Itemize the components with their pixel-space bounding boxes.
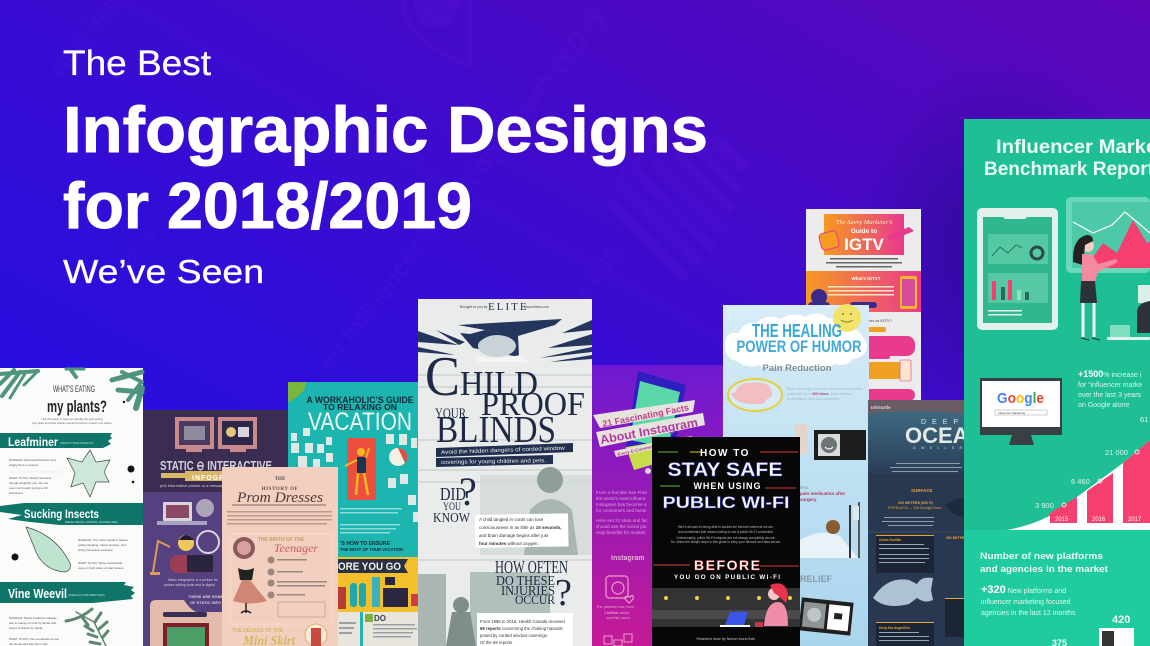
panel: plants: soap on both sides of plant leaves [78,566,124,570]
brush: leafminer [0,433,112,449]
chart: search growth: 21 000 [1105,448,1128,457]
panel: plants: my plants? [47,397,107,416]
panel: plants: edges of leaves by adults [9,626,43,630]
panel: plants [0,368,143,646]
background watermark pattern: $ 6.5B [614,124,666,185]
icon: dress [233,537,267,613]
background watermark pattern: 2016 [117,225,162,273]
panel: workaholic vacation: ORE YOU GO [338,561,401,573]
panel: child proof blinds: www.elitew.com [524,305,549,309]
brush: leafminer: Leafminer [8,435,58,449]
panel: prom dresses: THE DECADE OF THE [232,628,284,634]
did you know: KNOW [433,511,471,526]
body text: Instagram [611,555,644,562]
icon: instagram camera [606,576,633,603]
panel: plants: sticky honeydew excretion [78,548,113,552]
panel: deep ocean dwellers: 300 METERS [946,536,967,540]
panel: new platforms: and agencies in the market [980,564,1109,575]
panel: workaholic vacation: VACATION [308,408,412,436]
leaves [0,369,142,408]
chart: search growth [1007,415,1150,530]
panel: plants: WHAT TO DO: Use nematodes to eat [9,637,59,641]
brush: leafminer: (MINOTYTES) INSECTS [60,441,93,445]
subtitle [436,443,573,467]
body text: Here are 21 stats and fac [596,518,648,523]
panel: instagram facts: The platform has more [596,605,634,609]
before heading [653,557,799,581]
icon: leaf 2 [26,527,70,572]
panel: plants: WHAT TO DO: Spray insecticidal [78,561,122,565]
panel: plants: though unsightly, you can use [9,481,49,485]
panel: plants: DAMAGE: Tiny holes poked in leaves, [78,538,129,542]
panel: healing power of humor: which are up to 500 times more effective [787,392,852,396]
panel: plants: WHAT TO DO: Mostly harmless [9,476,52,480]
body text: should use the social pla [596,524,647,529]
panel: deep ocean dwellers: DEEP [921,419,964,426]
panel: plants: due to eating of roots by larvae and [9,621,56,625]
before heading: YOU GO ON PUBLIC WI-FI [674,574,780,581]
banner: 21 fascinating facts: About Instagram [599,415,699,447]
band: what's IGTV [806,271,921,312]
panel: influencer marketing benchmark report: Benchmark Report [984,159,1150,180]
panel: wifi safety [652,437,800,646]
panel: influencer marketing benchmark report [964,119,1150,646]
panel: healing power of humor: RELIEF [800,574,833,584]
panel: healing power of humor: Pain Reduction [762,363,832,373]
headline: BLINDS [436,409,556,451]
panel: wifi safety: So, follow the simple steps in this guide to keep your devices and data secure. [671,540,781,544]
text: google stat: on Google alone [1078,402,1129,409]
panel: static vs interactive infographic: ph6 informative picture or a message [160,483,227,488]
panel: wifi safety: Unfortunately, public Wi-Fi hotspots are not always completely secure. [677,536,776,540]
panel: workaholic vacation: TO RELAXING ON [323,403,397,412]
background watermark pattern [44,0,775,376]
panel: child proof blinds: ELITE [488,301,529,313]
text box: Of the 69 reports [480,640,512,645]
background watermark pattern: $ 4.6B [574,243,626,304]
panel: wifi safety: WHEN USING [694,481,760,491]
subtitle: coverings for young children and pets. [441,458,547,466]
panel: prom dresses: THE [275,477,286,482]
panel: instagram facts: monthly users [606,616,630,620]
panel: plants: DAMAGE: Discolored blotches and [9,458,56,462]
body text: Instagram has become a [596,502,647,507]
panel: child proof blinds: Brought to you by [460,305,488,309]
panel: healing power of humor: at alleviating pain than morphine. [787,397,840,401]
did you know [433,469,477,526]
title: We’ve Seen [63,253,264,290]
panel: prom dresses [222,467,338,646]
panel: workaholic vacation [288,382,419,646]
panel: wifi safety: and sometimes that means having to use a public Wi-Fi connection. [678,530,774,534]
icon: person at desk [150,531,219,575]
panel: plants: WHAT’S EATING [53,384,95,394]
icon: laptop [157,499,214,525]
dark info box: Ocean Sunfish [879,538,901,542]
panel: deep ocean dwellers: EPIPELAGIC — The Sunlight Zone [888,506,941,510]
did you know: ? [459,469,477,514]
panel: wifi safety: PUBLIC WI-FI [662,493,790,512]
panel: IGTV: Guide to [851,228,877,235]
banner: 21 fascinating facts [593,400,705,457]
banner: 21 fascinating facts: 21 Fascinating Facts [601,402,690,429]
panel: healing power of humor: less [800,485,809,490]
icon: leaf 1 [67,450,110,497]
callout: A child tangled in cords can lose [479,517,544,522]
how often: OCCUR [515,592,555,607]
panel: plants: your plant and what solution would be best to protect your plants. [32,421,112,425]
body text: the world’s most influent [596,496,646,501]
text: google stat [1078,369,1142,409]
did you know: YOU [443,499,461,513]
banner: 21 fascinating facts: Every E-Commerce [617,443,659,457]
panel: plants: leafminers. [9,491,24,495]
text: google stat: +1500% increase i [1078,369,1142,379]
text box: 69 reports concerning the choking hazards [480,626,563,631]
panel: plants: yellow stippling, raised pimples, and [78,543,126,547]
panel: plants: wiggly lines on leaves [9,463,39,467]
chart: search growth: 61 [1140,415,1148,424]
panel: IGTV: IGTV [844,235,884,254]
panel: wifi safety: HOW TO [700,448,750,459]
panel: static vs interactive infographic [143,410,289,646]
chart: search growth: 3 900 [1035,501,1054,510]
panel: instagram facts [592,365,724,646]
body text: for consumers and busin [596,508,647,513]
how often: DO THESE [496,574,555,589]
panel: instagram facts: 1 billion active [604,611,629,615]
dark info box [876,535,934,573]
icon: google monitor: Influencer Marketing [998,411,1026,415]
callout: four minutes without oxygen. [479,541,539,546]
background watermark pattern: ed Influencer Marketing growth (YOY) [313,6,610,376]
icon: brain [728,379,782,411]
panel: healing power of humor: When we laugh, our brain produces endorphins [787,387,863,391]
panel: healing power of humor: pain medication after [800,491,846,496]
panel: deep ocean dwellers: Infoturtle [871,405,891,410]
icon: tablet [977,208,1058,330]
panel: IGTV: The Savvy Marketer’s [836,219,893,226]
subtitle: Avoid the hidden dangers of corded window [441,446,566,456]
panel: healing power of humor: POWER OF HUMOR [736,337,862,356]
panel: healing power of humor: surgery [800,497,817,502]
did you know: DID [440,484,466,504]
title [63,44,708,290]
panel: prom dresses: HISTORY OF [262,487,298,492]
title: Infographic Designs [63,93,708,166]
panel: workaholic vacation: DO [374,614,386,623]
panel: new platforms: Number of new platforms [980,551,1103,562]
panel: static vs interactive infographic: picture editing tools and is digital [164,583,215,587]
panel: IGTV: What’s IGTV? [851,276,881,281]
list: pills [860,336,915,356]
icon: google monitor [980,378,1062,445]
panel: prom dresses: Teenager [274,541,318,555]
how often: INJURIES [501,584,555,599]
panel: static vs interactive infographic: Static infographic is a picture for [168,578,219,582]
panel: new platforms: influencer marketing focused [981,599,1071,606]
icon: phone [626,371,695,470]
how often: HOW OFTEN [495,557,568,577]
how often [495,557,572,614]
brush: vine weevil: Vine Weevil [8,586,67,601]
panel: wifi safety: Research done by Norton found that: [697,637,755,641]
panel: plants: the larvae and trap them with [9,642,48,646]
chart screen [1066,197,1150,273]
panel: deep ocean dwellers: OCEAN [905,423,984,448]
brush: vine weevil [0,582,135,603]
body text: reap benefits for marketi [596,530,646,535]
icon: anglerfish [873,578,933,606]
figure: seated man and desk [1107,285,1150,340]
towel and figure [345,438,376,500]
brush: sucking insects: Sucking Insects [24,507,99,521]
chart: search growth: 6 460 [1071,477,1090,486]
text box: posed by corded window coverings. [480,633,548,638]
text: google stat: for “influencer marke [1078,382,1142,389]
body text: From a humble San Fran [596,490,648,495]
headline: PROOF [481,386,585,423]
title: The Best [63,44,211,83]
text box: From 1986 to 2016, Health Canada received [480,619,565,624]
title: for 2018/2019 [63,169,472,242]
panel: IGTV: Sets at IGTV? [866,318,893,323]
body text [596,490,648,562]
panel: child proof blinds [418,299,592,646]
icon: tv [814,430,866,460]
panel: deep ocean dwellers: DWELLER [913,445,967,450]
panel: healing power of humor: THE HEALING [752,321,842,341]
icon: google monitor: Google [997,390,1044,407]
panel: prom dresses: THE BIRTH OF THE [258,537,305,543]
icon: two monitors [175,417,257,452]
icon: patient in bed [800,502,860,558]
blinds with child face [418,319,592,362]
heading: STATIC ⊖ INTERACTIVE [160,458,272,473]
text box [477,613,573,646]
panel: new platforms: +320 New platforms and [981,584,1066,596]
image: child silhouette and curtain [418,572,550,646]
callout [475,513,569,548]
brush: sucking insects: (MEALYBUGS, APHIDS, WHITEFLIES) [65,520,118,524]
panel: deep ocean dwellers: Deep Sea Anglerfish [879,626,910,630]
callout: and brain damage begins after just [479,533,549,538]
panel: wifi safety: STAY SAFE [668,460,782,481]
chart: search growth: 2017 [1128,517,1142,523]
image: boy [480,467,592,555]
panel: influencer marketing benchmark report: Influencer Market [996,137,1150,158]
yellow before you go [338,557,419,612]
panel: plants: Use this guide to help you identify the pest eating [42,417,103,421]
panel: workaholic vacation: ’S HOW TO ENSURE [340,541,391,547]
headline: CHILD [425,346,538,408]
chart: search growth: 2016 [1092,517,1106,523]
panel: wifi safety: We’re all used to being able to access the internet wherever we are, [678,525,774,529]
panel: healing power of humor [723,304,869,646]
how often: ? [555,572,572,614]
headline [425,346,585,451]
callout: consciousness in as little as 15 seconds, [479,525,562,530]
panel: plants: neem oil in early spring to kill [9,486,48,490]
figure: woman [1073,235,1118,340]
brush: sucking insects [0,503,143,525]
brush: vine weevil: (WEEVILS AND BEETLES) [68,593,105,597]
panel: workaholic vacation: THE MOST OF YOUR VACATION [340,547,403,552]
panel: deep ocean dwellers: SURFACE [911,488,933,493]
icon: film strip [798,597,854,636]
panel: new platforms: 420 [1112,614,1130,626]
street scene [652,583,800,627]
headline: YOUR [435,406,466,422]
panel: deep ocean dwellers: 200 METERS (650 ft) [898,501,934,505]
panel: plants: DAMAGE: Plants suddenly collapse [9,616,57,620]
panel: static vs interactive infographic: INFOGRAPHIC [192,475,252,482]
panel: workaholic vacation: A WORKAHOLIC’S GUIDE [306,395,414,406]
panel: new platforms [964,530,1150,646]
panel: new platforms: agencies in the last 12 months [981,610,1076,617]
folder [150,600,223,646]
panel: IGTV [806,209,921,404]
text: google stat: over the last 3 years [1078,392,1142,399]
panel: prom dresses: Prom Dresses [236,490,323,506]
before heading: BEFORE [694,557,760,573]
panel: deep ocean dwellers [868,400,984,646]
panel: static vs interactive infographic: OF STATIC INFO [190,600,221,605]
cloud [725,313,867,370]
icon: fern [66,609,108,646]
panel: static vs interactive infographic: THESE ARE SOME [188,594,224,599]
chart: search growth: 2015 [1055,517,1069,523]
icon: sun [833,304,861,332]
